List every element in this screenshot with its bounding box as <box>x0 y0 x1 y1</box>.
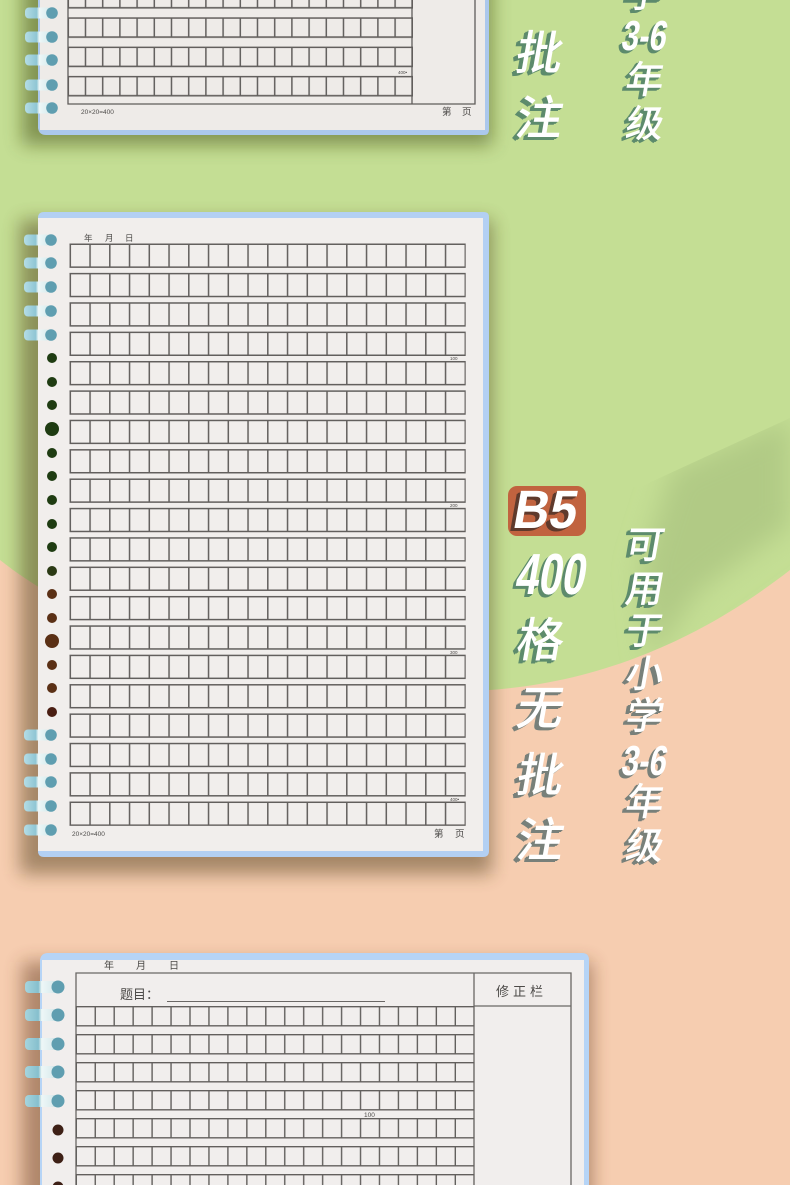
notebook: top cropped page: 20×20=400 <box>81 109 114 116</box>
heading: 400格无批注: 400 <box>512 542 593 607</box>
icon: top page binder rings <box>25 7 58 114</box>
icon: bottom page punched holes <box>52 1124 64 1185</box>
heading: 400格无批注: 无 <box>513 682 569 734</box>
text block: 可用于小学3-6年级: 小 <box>622 654 668 696</box>
text block: 可用于小学3-6年级: 级 <box>622 826 668 868</box>
badge: B5: B5 <box>509 480 583 540</box>
text block: top cropped heading: 3-6 <box>618 12 672 59</box>
notebook: main B5 400-grid page: 月 <box>105 233 114 243</box>
background: green curved area <box>0 0 790 691</box>
icon: main page lower binder rings <box>24 729 57 836</box>
notebook: top cropped page: 第 <box>442 106 452 118</box>
notebook: main B5 400-grid page: 日 <box>125 233 134 243</box>
notebook: main B5 400-grid page: 年 <box>84 233 93 243</box>
text block: top cropped heading: 级 <box>622 104 668 146</box>
notebook: bottom page with correction column: 题目： <box>120 987 159 1002</box>
text block: 可用于小学3-6年级: 3-6 <box>618 737 672 784</box>
text block: top cropped heading: 年 <box>622 60 668 102</box>
notebook: bottom page with correction column: 日 <box>169 961 179 972</box>
heading: 400格无批注: 注 <box>513 814 569 866</box>
notebook: main B5 400-grid page: 200 <box>450 503 458 508</box>
notebook: top cropped page: 页 <box>462 107 472 118</box>
notebook: main B5 400-grid page: 第 <box>434 828 444 840</box>
notebook: main B5 400-grid page: 页 <box>455 829 465 840</box>
text block: 可用于小学3-6年级: 年 <box>622 782 668 824</box>
text block: top cropped heading: 批 <box>512 26 568 80</box>
text block: top cropped heading <box>512 0 672 146</box>
icon: main page upper binder rings <box>24 234 57 341</box>
notebook: top cropped page: 400• <box>398 70 408 75</box>
notebook: bottom page with correction column: 修正栏 <box>496 984 547 999</box>
notebook: main B5 400-grid page: 20×20=400 <box>72 831 105 838</box>
icon: main page punched holes <box>45 353 59 717</box>
heading: 400格无批注 <box>512 542 593 866</box>
notebook: main B5 400-grid page: 100 <box>450 356 458 361</box>
text block: 可用于小学3-6年级: 学 <box>622 696 668 738</box>
text block: 可用于小学3-6年级 <box>618 525 672 868</box>
notebook: top cropped page <box>22 0 492 145</box>
text block: 可用于小学3-6年级: 于 <box>622 611 668 653</box>
text block: 可用于小学3-6年级: 用 <box>622 569 668 611</box>
heading: 400格无批注: 批 <box>513 748 569 802</box>
notebook: bottom page with correction column <box>22 953 592 1185</box>
notebook: main B5 400-grid page <box>20 212 492 874</box>
notebook: bottom page with correction column: 年 <box>104 959 114 972</box>
notebook: main B5 400-grid page: 300 <box>450 650 458 655</box>
text block: top cropped heading: 注 <box>512 92 568 144</box>
notebook: bottom page with correction column: 100 <box>364 1112 375 1119</box>
background: soft leaf shadow <box>640 418 790 660</box>
text block: 可用于小学3-6年级: 可 <box>622 525 668 567</box>
notebook: main B5 400-grid page: 400• <box>450 797 460 802</box>
heading: 400格无批注: 格 <box>513 614 569 666</box>
notebook: bottom page with correction column: 月 <box>136 960 146 972</box>
icon: bottom page binder rings <box>25 980 64 1108</box>
